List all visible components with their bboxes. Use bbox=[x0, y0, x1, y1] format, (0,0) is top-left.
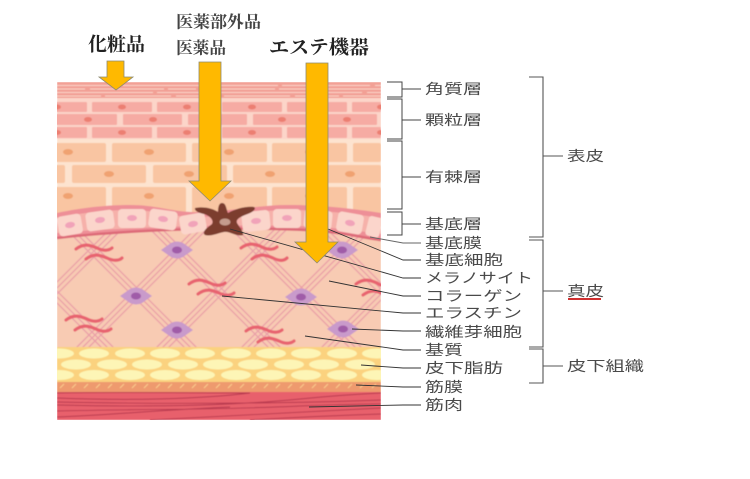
label: dermis: 真皮 bbox=[567, 283, 604, 299]
labels: layers and components: 基質 bbox=[425, 342, 463, 358]
arrow: pharmaceuticals bbox=[189, 62, 231, 201]
arrow: esthetic devices bbox=[295, 63, 338, 263]
labels: layers and components: メラノサイト bbox=[425, 270, 533, 286]
labels: layers and components: コラーゲン bbox=[425, 288, 522, 304]
labels: layers and components: 基底細胞 bbox=[425, 252, 503, 268]
collagen lattice bbox=[57, 230, 381, 348]
basal cells bbox=[56, 208, 383, 238]
heading: esthetic devices: エステ機器 bbox=[269, 36, 369, 58]
bracket: epidermis bbox=[529, 77, 563, 237]
layer: muscle bbox=[57, 392, 381, 420]
layer: stratum basale bbox=[56, 205, 383, 240]
labels: layers and components: 基底膜 bbox=[425, 235, 482, 251]
layer: subcutaneous fat bbox=[44, 347, 392, 382]
labels: layers and components: 顆粒層 bbox=[425, 112, 482, 128]
layer: stratum granulosum bbox=[50, 98, 385, 142]
labels: layers and components bbox=[425, 81, 533, 413]
layer: dermis base bbox=[57, 229, 381, 348]
underline: dermis bbox=[568, 298, 601, 300]
layer: fascia bbox=[57, 382, 381, 392]
skin structure infographic bbox=[57, 13, 644, 420]
heading: pharmaceuticals: 医薬品 bbox=[176, 38, 226, 58]
labels: layers and components: 基底層 bbox=[425, 216, 482, 232]
bracket: stratum basale bbox=[387, 212, 421, 235]
labels: layers and components: 皮下脂肪 bbox=[425, 360, 503, 376]
bracket: dermis bbox=[529, 240, 563, 347]
heading: cosmetics: 化粧品 bbox=[88, 34, 145, 56]
elastin fibers bbox=[66, 244, 381, 343]
labels: layers and components: 筋肉 bbox=[425, 397, 463, 413]
skin cross-section diagram bbox=[57, 82, 381, 420]
heading: quasi-drugs: 医薬部外品 bbox=[176, 12, 261, 32]
leader lines bbox=[222, 229, 421, 407]
melanocyte bbox=[195, 203, 255, 236]
label: subcutaneous tissue: 皮下組織 bbox=[567, 358, 644, 374]
arrow: cosmetics bbox=[99, 61, 133, 90]
label: epidermis: 表皮 bbox=[567, 148, 604, 164]
fibroblasts bbox=[120, 242, 359, 338]
layer: stratum spinosum bbox=[45, 139, 381, 219]
layer: stratum corneum bbox=[57, 82, 381, 98]
labels: layers and components: 筋膜 bbox=[425, 379, 463, 395]
labels: layers and components: 有棘層 bbox=[425, 169, 482, 185]
bracket: subcutaneous tissue bbox=[529, 349, 563, 383]
bracket: stratum spinosum bbox=[387, 141, 421, 209]
labels: layers and components: エラスチン bbox=[425, 305, 522, 321]
bracket: stratum corneum bbox=[387, 82, 421, 97]
labels: layers and components: 繊維芽細胞 bbox=[425, 324, 522, 340]
bracket: stratum granulosum bbox=[387, 99, 421, 139]
labels: layers and components: 角質層 bbox=[425, 81, 482, 97]
